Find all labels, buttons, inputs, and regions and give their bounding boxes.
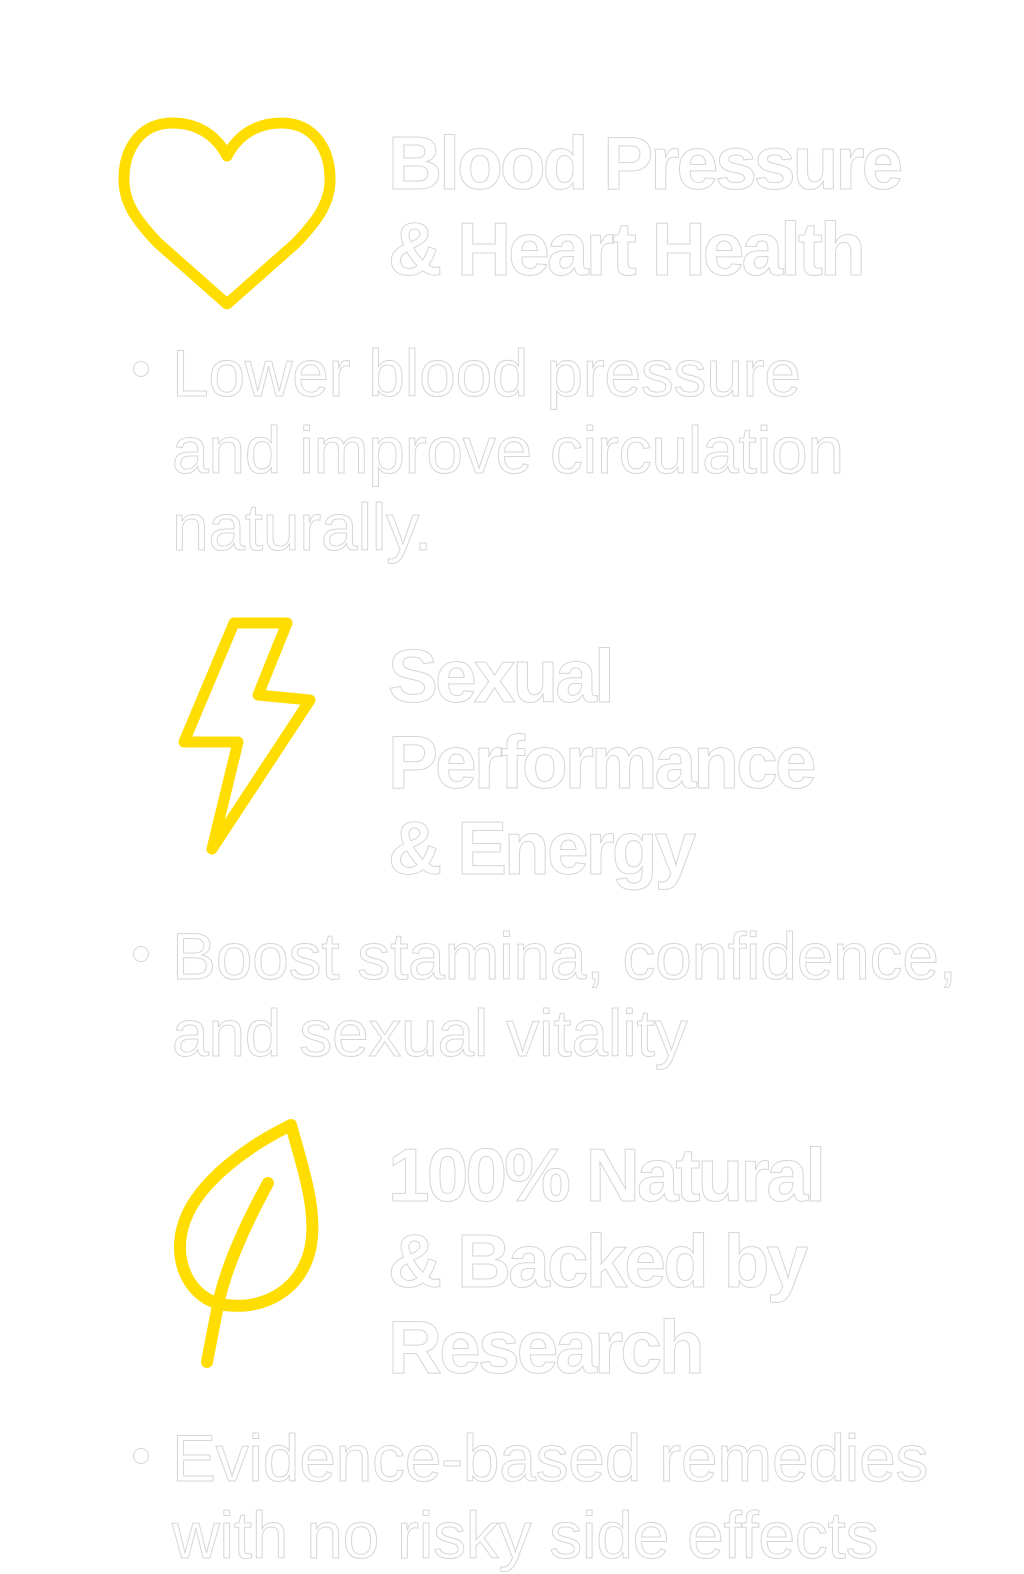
bullet: stamina: Boost stamina, confidence,: [172, 919, 957, 993]
heading: natural: 100% Natural: [388, 1133, 823, 1217]
bullet: blood pressure: [133, 336, 844, 564]
bullet: blood pressure: and improve circulation: [172, 413, 844, 487]
heading: sexual performance: [388, 634, 814, 890]
heading: natural: [388, 1133, 823, 1389]
heading: sexual performance: & Energy: [388, 806, 693, 890]
heading: blood pressure: & Heart Health: [388, 207, 863, 291]
bullet: evidence: [133, 1421, 928, 1572]
bullet: stamina: and sexual vitality: [172, 996, 687, 1070]
heading: blood pressure: Blood Pressure: [388, 121, 900, 205]
bullet: evidence: with no risky side effects: [172, 1498, 878, 1572]
heading: sexual performance: Sexual: [388, 634, 612, 718]
heading: sexual performance: Performance: [388, 720, 814, 804]
bullet: evidence: Evidence-based remedies: [172, 1421, 928, 1495]
bullet: blood pressure: Lower blood pressure: [172, 336, 801, 410]
heading: natural: & Backed by: [388, 1219, 805, 1303]
heading: natural: Research: [388, 1305, 702, 1389]
bullet: blood pressure: naturally.: [172, 490, 432, 564]
heading: blood pressure: [388, 121, 902, 291]
bullet: stamina: [133, 919, 957, 1070]
